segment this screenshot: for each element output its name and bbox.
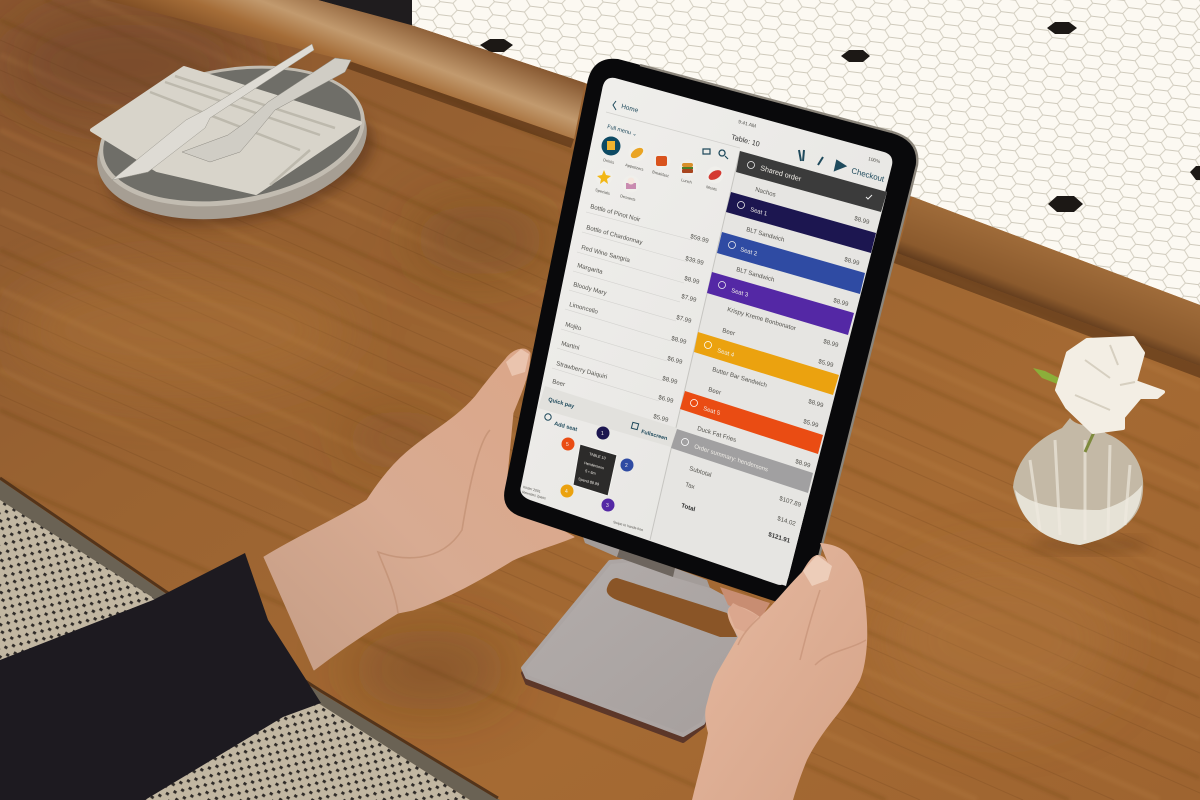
seat 5 marker (562, 438, 574, 450)
tablet stand (523, 535, 738, 741)
wooden rail left (105, 0, 585, 139)
finger behind tablet (720, 587, 770, 620)
order band: seat 1 (726, 192, 876, 253)
menu list: Bloody Mary (573, 281, 608, 297)
tablet body (504, 59, 917, 605)
quick pay and seat map: Kirder 2001 (523, 485, 541, 494)
panel: right order column background (650, 151, 887, 586)
black tiles (480, 22, 1200, 212)
category icons: Desserts (620, 193, 636, 202)
fork (182, 58, 351, 162)
menu list: $8.99 (684, 275, 701, 286)
category icons (595, 136, 724, 202)
menu list: Strawberry Daiquiri (556, 360, 608, 381)
wooden rail right (897, 197, 1200, 366)
order list: Tax (685, 481, 696, 491)
category icons: Appetizers (625, 162, 644, 172)
table popup (573, 444, 617, 496)
dark furniture behind rail (318, 0, 412, 26)
menu list: $6.99 (667, 355, 684, 366)
menu list: $59.99 (690, 233, 710, 245)
seat 2 marker (620, 458, 634, 472)
quick pay and seat map: Hendersons (584, 461, 604, 470)
category icons: Drinks (603, 157, 615, 165)
order band: seat 4 (694, 332, 839, 395)
order list: Total (681, 502, 696, 513)
menu list: Bottle of Pinot Noir (590, 203, 641, 224)
quick pay and seat map: Swipe to hands-free (613, 520, 644, 532)
category icons: Breakfast (652, 169, 670, 179)
menu list: $39.99 (685, 255, 705, 267)
order list: Seat 2 (740, 247, 758, 258)
category icons: Lunch (681, 177, 692, 185)
menu list: $8.99 (662, 375, 679, 386)
flowers (1057, 338, 1163, 432)
menu list: $6.99 (658, 394, 675, 405)
napkin (92, 68, 360, 193)
menu list: Mojito (565, 321, 582, 332)
order list: Beer (708, 386, 722, 397)
order list: BLT Sandwich (746, 226, 786, 244)
quick pay and seat map: Fullscreen (641, 429, 668, 442)
right hand (692, 543, 867, 800)
order list: Beer (722, 327, 736, 338)
menu list: Bottle of Chardonnay (586, 224, 644, 247)
quick pay and seat map: 5 (566, 442, 569, 448)
quick pay and seat map: 4 (565, 489, 568, 495)
menu list: $7.99 (681, 293, 698, 304)
seat 4 marker (560, 484, 574, 498)
header text: Checkout (851, 166, 886, 184)
menu list: $8.99 (671, 335, 688, 346)
quick pay and seat map: 5 • 6m (585, 469, 596, 476)
header text (607, 101, 886, 184)
woven floor mat (0, 498, 470, 800)
knife (112, 44, 314, 180)
order list: $8.99 (844, 256, 861, 267)
seat 1 marker (596, 426, 610, 440)
quick pay and seat map: TABLE 10 (589, 452, 606, 460)
floor tiles (411, 0, 1200, 305)
order list: Order summary: hendersons (694, 444, 768, 474)
flower bud (1033, 368, 1063, 385)
header text: Table: 10 (731, 132, 761, 149)
quick pay and seat map: Spend $8.99 (578, 477, 599, 487)
quick pay and seat map: 3 (606, 503, 609, 509)
order list: Seat 5 (703, 406, 721, 417)
seat 3 marker (602, 498, 614, 512)
quick pay and seat map: Add seat (554, 421, 578, 433)
flower vase (1013, 338, 1163, 555)
quick pay and seat map (522, 397, 668, 532)
menu list: $5.99 (653, 413, 670, 424)
left hand (264, 349, 574, 670)
order band: seat 2 (717, 232, 865, 294)
order list: Butter Bar Sandwich (712, 366, 768, 389)
quick pay and seat map: Quick pay (548, 397, 575, 410)
order band: seat 3 (707, 272, 854, 335)
header text: Home (621, 103, 639, 115)
stand clips (583, 535, 710, 588)
screen (520, 78, 892, 585)
header text: 100% (868, 156, 881, 165)
rail groove (340, 62, 1200, 378)
menu list: $7.99 (676, 314, 693, 325)
order list: Seat 4 (717, 348, 735, 359)
order list: $8.99 (833, 297, 850, 308)
toolbar icons (799, 150, 845, 170)
order list: $8.99 (854, 215, 871, 226)
order list: $5.99 (803, 418, 820, 430)
order band: summary (671, 429, 813, 493)
menu list: Margarita (577, 262, 604, 276)
left arm sleeve (0, 553, 321, 800)
order list: $8.99 (808, 398, 825, 410)
order band: shared order (736, 151, 887, 212)
order list: Shared order (760, 163, 803, 184)
order list: Seat 3 (731, 288, 749, 299)
quick pay and seat map: 1 (601, 431, 604, 437)
order list: $14.02 (777, 515, 797, 528)
stand cut-out (607, 578, 737, 637)
order list: Seat 1 (750, 207, 768, 218)
quick pay and seat map: Rewsties 2pass (522, 490, 546, 501)
order list: Subtotal (689, 465, 712, 479)
table edge strip (0, 480, 500, 800)
order band: seat 5 (680, 391, 823, 454)
order list: $8.99 (823, 338, 840, 349)
menu list (552, 203, 710, 424)
order list: $8.99 (795, 458, 811, 470)
category icons: Specials (595, 187, 610, 196)
dinner plate with napkin and cutlery (87, 44, 384, 245)
menu list: Limoncello (569, 301, 599, 316)
order list: BLT Sandwich (736, 266, 776, 284)
category icons: Meats (706, 184, 717, 192)
order list: $107.89 (779, 495, 802, 509)
header text: Full menu ⌄ (607, 124, 638, 138)
menu list: Martini (561, 340, 580, 352)
order list: $5.99 (818, 358, 835, 369)
quick pay and seat map: 2 (625, 463, 628, 469)
order list: Nachos (755, 186, 776, 199)
header text: 9:41 AM (738, 119, 757, 130)
order list: Krispy Kreme Bonbonator (727, 306, 796, 332)
order list (681, 162, 872, 545)
quick pay band (538, 386, 677, 447)
order list: $121.91 (768, 531, 791, 545)
menu list: Red Wine Sangria (581, 244, 631, 264)
order list: Duck Fat Fries (697, 425, 737, 444)
menu list: Beer (552, 378, 566, 388)
